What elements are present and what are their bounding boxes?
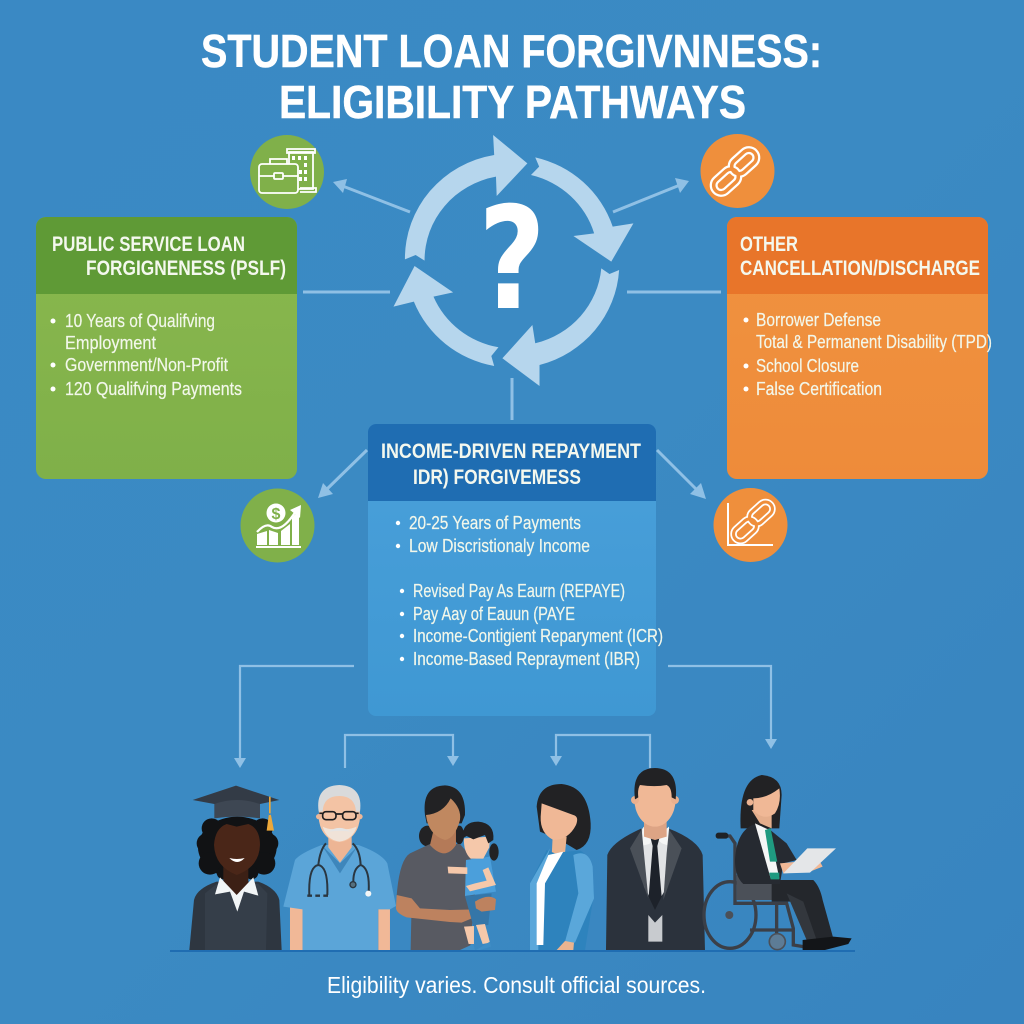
list: PSLF requirements — [50, 311, 242, 399]
list: discharge types: Borrower Defense — [756, 310, 881, 330]
heading: IDR: INCOME-DRIVEN REPAYMENT — [381, 440, 641, 463]
person: woman in blue cardigan — [530, 784, 594, 950]
heading: PSLF: PUBLIC SERVICE LOAN — [52, 233, 245, 256]
connector arrows to people — [234, 666, 777, 768]
list: discharge types: School Closure — [756, 356, 859, 376]
icon: dollar growth chart: $ — [272, 506, 281, 523]
list: IDR criteria: Low Discristionaly Income — [409, 536, 590, 556]
heading: IDR: IDR) FORGIVEMESS — [413, 466, 581, 489]
list: PSLF requirements: Employment — [65, 333, 156, 353]
heading: PSLF: FORGIGNENESS (PSLF) — [86, 257, 286, 280]
list: IDR plans: Income-Contigient Reparyment (ICR) — [413, 626, 663, 646]
person: woman in wheelchair — [704, 775, 852, 950]
heading: other cancellation — [727, 217, 988, 294]
list: IDR criteria: 20-25 Years of Payments — [409, 513, 581, 533]
central cycle arrows with question mark: ? — [478, 176, 546, 342]
person: man in suit — [606, 768, 705, 950]
title — [201, 25, 822, 128]
list: IDR plans: Pay Aay of Eauun (PAYE — [413, 604, 575, 624]
person: doctor — [283, 785, 396, 950]
heading: PSLF — [36, 217, 297, 294]
connector arrows from cycle — [303, 178, 721, 499]
heading: other cancellation: OTHER — [740, 233, 798, 256]
central cycle arrows with question mark — [394, 135, 633, 386]
list: discharge types — [744, 310, 992, 399]
title: ELIGIBILITY PATHWAYS — [279, 76, 746, 128]
heading: IDR — [368, 424, 656, 501]
list: IDR criteria — [396, 513, 590, 556]
people illustration — [170, 768, 855, 952]
list: IDR plans: Income-Based Reprayment (IBR) — [413, 649, 640, 669]
list: IDR plans — [400, 581, 663, 669]
list: PSLF requirements: 10 Years of Qualifving — [65, 311, 215, 331]
icon: chain link — [700, 134, 774, 208]
title: STUDENT LOAN FORGIVNNESS: — [201, 25, 822, 77]
list: PSLF requirements: Government/Non-Profit — [65, 355, 228, 375]
panel: other cancellation and discharge — [727, 217, 992, 479]
icon: briefcase and building — [250, 135, 324, 209]
person: graduate — [189, 786, 282, 950]
panel: public service loan forgiveness — [36, 217, 297, 479]
footer note: Eligibility varies. Consult official sources. — [327, 972, 706, 998]
list: PSLF requirements: 120 Qualifving Payments — [65, 379, 242, 399]
ground line — [170, 950, 855, 952]
panel: income-driven repayment forgiveness — [368, 424, 663, 716]
person: parent with child — [396, 785, 499, 950]
icon: chain link on chart axes — [714, 488, 788, 562]
list: discharge types: False Certification — [756, 379, 882, 399]
icon: dollar growth chart — [240, 488, 314, 562]
list: IDR plans: Revised Pay As Eaurn (REPAYE) — [413, 581, 625, 601]
